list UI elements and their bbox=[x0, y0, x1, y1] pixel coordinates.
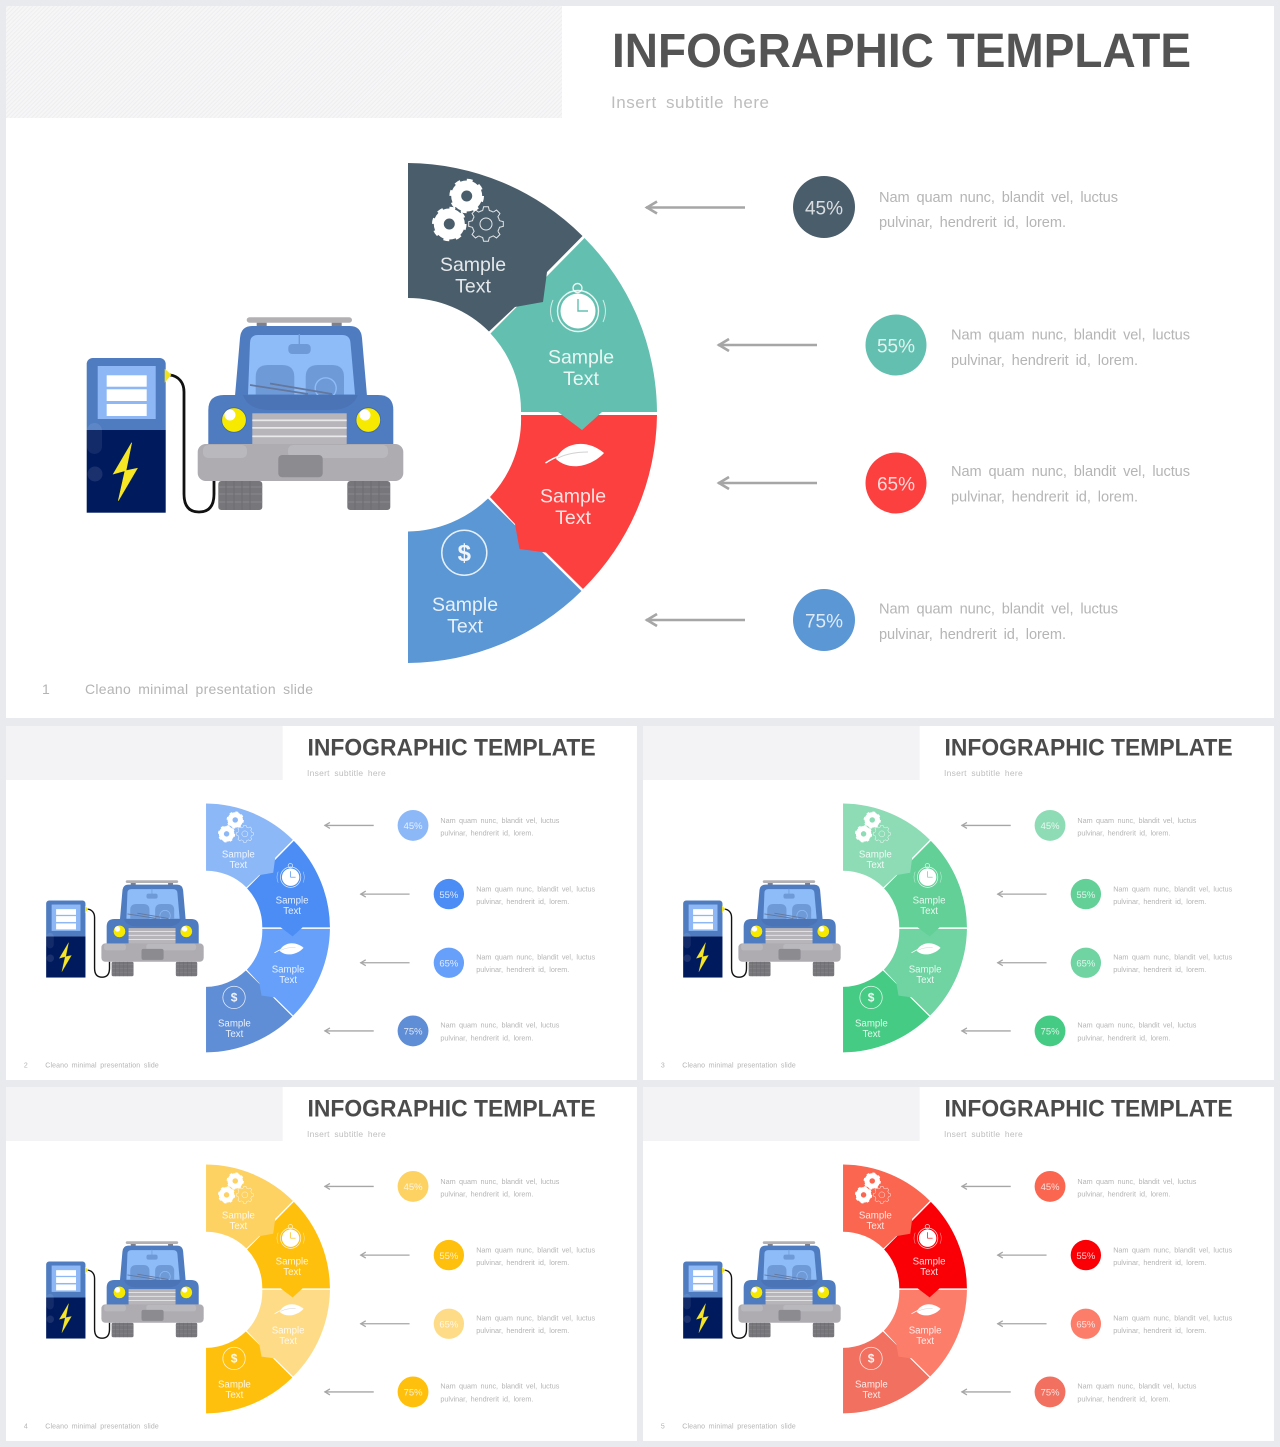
ring segment: dollar bbox=[843, 970, 929, 1052]
ring segment: gears: Sample bbox=[859, 1210, 892, 1221]
arrow 1 bbox=[961, 822, 1011, 828]
item 75% bbox=[1035, 1377, 1197, 1407]
item 75% bbox=[398, 1377, 560, 1407]
title: INFOGRAPHIC TEMPLATE bbox=[945, 735, 1233, 762]
subtitle: Insert subtitle here bbox=[944, 768, 1023, 778]
arrow 2 bbox=[360, 891, 410, 897]
item 45%: 45% bbox=[1041, 821, 1060, 832]
item 55%: 55% bbox=[439, 1251, 459, 1262]
item 55%: pulvinar, hendrerit id, lorem. bbox=[476, 1258, 569, 1267]
item 75% bbox=[398, 1016, 560, 1046]
arrow 4 bbox=[961, 1028, 1011, 1034]
item 55%: 55% bbox=[1076, 1251, 1096, 1262]
arrow 1 bbox=[324, 822, 374, 828]
item 75%: 75% bbox=[404, 1027, 423, 1038]
item 65%: 65% bbox=[1076, 1319, 1096, 1330]
item 55%: pulvinar, hendrerit id, lorem. bbox=[1113, 1258, 1206, 1267]
arrow 4 bbox=[646, 614, 745, 626]
ring segment: stopwatch: Text bbox=[283, 906, 301, 917]
item 55% bbox=[434, 879, 596, 909]
item 55%: Nam quam nunc, blandit vel, luctus bbox=[951, 328, 1190, 344]
ring segment: leaf bbox=[247, 929, 330, 1016]
item 75% bbox=[1035, 1016, 1197, 1046]
ring segment: dollar: Sample bbox=[218, 1379, 251, 1390]
item 45%: Nam quam nunc, blandit vel, luctus bbox=[879, 190, 1118, 206]
arrow 4 bbox=[324, 1389, 374, 1395]
ring segment: leaf: Sample bbox=[909, 1325, 942, 1336]
footer: 2 bbox=[24, 1063, 28, 1070]
item 75%: Nam quam nunc, blandit vel, luctus bbox=[879, 602, 1118, 618]
ring segment: leaf bbox=[247, 1290, 330, 1377]
item 65%: Nam quam nunc, blandit vel, luctus bbox=[951, 464, 1190, 480]
arrow 4 bbox=[324, 1028, 374, 1034]
item 75%: 75% bbox=[1041, 1027, 1060, 1038]
item 45%: pulvinar, hendrerit id, lorem. bbox=[879, 215, 1066, 231]
item 55%: pulvinar, hendrerit id, lorem. bbox=[476, 897, 569, 906]
item 55%: Nam quam nunc, blandit vel, luctus bbox=[1113, 1245, 1233, 1254]
item 75%: Nam quam nunc, blandit vel, luctus bbox=[440, 1021, 560, 1030]
ring segment: dollar bbox=[843, 1331, 929, 1413]
ring segment: leaf bbox=[884, 1290, 967, 1377]
item 45% bbox=[793, 176, 1118, 238]
subtitle: Insert subtitle here bbox=[307, 1129, 386, 1139]
item 65%: Nam quam nunc, blandit vel, luctus bbox=[1113, 1313, 1233, 1322]
ring segment: stopwatch bbox=[490, 238, 657, 430]
ring segment: stopwatch: Sample bbox=[276, 895, 309, 906]
item 75%: 75% bbox=[805, 612, 843, 632]
item 55%: 55% bbox=[877, 336, 915, 358]
ring segment: leaf: Text bbox=[916, 1336, 934, 1347]
title: INFOGRAPHIC TEMPLATE bbox=[945, 1096, 1233, 1123]
item 45%: pulvinar, hendrerit id, lorem. bbox=[1077, 1189, 1170, 1198]
ring segment: stopwatch: Sample bbox=[913, 895, 946, 906]
ring segment: leaf: Sample bbox=[272, 964, 305, 975]
ring segment: gears bbox=[206, 1165, 293, 1248]
slide 1: main slide bbox=[6, 6, 1274, 718]
ring segment: leaf bbox=[490, 415, 657, 589]
item 75%: 75% bbox=[1041, 1388, 1060, 1399]
item 55%: 55% bbox=[439, 890, 459, 901]
ring segment: stopwatch bbox=[884, 1202, 967, 1297]
ring segment: gears: Sample bbox=[440, 254, 506, 276]
slide 3: green variant bbox=[643, 726, 1274, 1080]
footer: 1 bbox=[42, 681, 50, 697]
ring segment: leaf: Text bbox=[279, 1336, 297, 1347]
slide 2: blue variant bbox=[6, 726, 637, 1080]
item 75%: Nam quam nunc, blandit vel, luctus bbox=[1077, 1021, 1197, 1030]
ring segment: stopwatch: Sample bbox=[276, 1256, 309, 1267]
ring segment: leaf: Text bbox=[916, 975, 934, 986]
electric car at charging pump bbox=[683, 1241, 841, 1339]
arrow 2 bbox=[997, 1252, 1047, 1258]
item 65%: 65% bbox=[439, 1319, 459, 1330]
header panel bbox=[6, 1087, 283, 1141]
ring segment: gears: Text bbox=[229, 860, 248, 871]
item 65%: pulvinar, hendrerit id, lorem. bbox=[476, 965, 569, 974]
ring segment: gears: Text bbox=[229, 1221, 248, 1232]
item 65%: 65% bbox=[1076, 958, 1096, 969]
arrow 1 bbox=[961, 1183, 1011, 1189]
ring segment: dollar: $ bbox=[231, 991, 238, 1005]
electric car at charging pump bbox=[46, 1241, 204, 1339]
item 75%: Nam quam nunc, blandit vel, luctus bbox=[1077, 1382, 1197, 1391]
ring segment: dollar: Text bbox=[226, 1029, 244, 1040]
electric car at charging pump bbox=[87, 317, 403, 513]
item 65%: 65% bbox=[439, 958, 459, 969]
title: INFOGRAPHIC TEMPLATE bbox=[612, 25, 1191, 78]
item 55%: Nam quam nunc, blandit vel, luctus bbox=[1113, 884, 1233, 893]
header panel bbox=[643, 1087, 920, 1141]
item 55%: pulvinar, hendrerit id, lorem. bbox=[1113, 897, 1206, 906]
ring segment: dollar bbox=[206, 970, 292, 1052]
slide 4: yellow variant bbox=[6, 1087, 637, 1441]
ring segment: leaf bbox=[884, 929, 967, 1016]
item 55%: 55% bbox=[1076, 890, 1096, 901]
ring segment: dollar: Text bbox=[226, 1390, 244, 1401]
footer: Cleano minimal presentation slide bbox=[85, 681, 313, 697]
footer: Cleano minimal presentation slide bbox=[45, 1424, 159, 1431]
item 75%: pulvinar, hendrerit id, lorem. bbox=[1077, 1033, 1170, 1042]
ring segment: dollar: Sample bbox=[432, 594, 498, 616]
ring segment: gears bbox=[206, 804, 293, 887]
ring segment: gears: Sample bbox=[222, 1210, 255, 1221]
electric car at charging pump bbox=[46, 880, 204, 978]
footer: Cleano minimal presentation slide bbox=[45, 1063, 159, 1070]
ring segment: gears: Sample bbox=[222, 849, 255, 860]
ring segment: dollar: Sample bbox=[855, 1018, 888, 1029]
header panel bbox=[6, 726, 283, 780]
item 45% bbox=[398, 810, 560, 841]
arrow 3 bbox=[360, 1321, 410, 1327]
item 65%: Nam quam nunc, blandit vel, luctus bbox=[476, 952, 596, 961]
footer: 4 bbox=[24, 1424, 28, 1431]
item 45% bbox=[1035, 810, 1197, 841]
item 55% bbox=[1071, 879, 1233, 909]
item 45%: Nam quam nunc, blandit vel, luctus bbox=[440, 816, 560, 825]
ring segment: dollar: $ bbox=[231, 1352, 238, 1366]
footer: Cleano minimal presentation slide bbox=[682, 1063, 796, 1070]
ring segment: dollar: $ bbox=[458, 540, 472, 567]
ring segment: gears: Text bbox=[455, 276, 491, 298]
item 45%: 45% bbox=[805, 198, 843, 220]
ring segment: stopwatch: Sample bbox=[548, 346, 614, 368]
ring segment: stopwatch bbox=[884, 841, 967, 936]
item 55%: Nam quam nunc, blandit vel, luctus bbox=[476, 884, 596, 893]
arrow 2 bbox=[360, 1252, 410, 1258]
ring segment: dollar bbox=[408, 498, 582, 663]
header panel bbox=[643, 726, 920, 780]
item 75%: pulvinar, hendrerit id, lorem. bbox=[440, 1033, 533, 1042]
ring segment: dollar: Text bbox=[447, 616, 483, 638]
item 55%: pulvinar, hendrerit id, lorem. bbox=[951, 353, 1138, 369]
arrow 3 bbox=[360, 960, 410, 966]
slide 5: red variant bbox=[643, 1087, 1274, 1441]
item 45%: 45% bbox=[1041, 1182, 1060, 1193]
ring segment: stopwatch: Text bbox=[563, 368, 599, 390]
item 45% bbox=[398, 1171, 560, 1202]
item 75%: pulvinar, hendrerit id, lorem. bbox=[1077, 1394, 1170, 1403]
arrow 4 bbox=[961, 1389, 1011, 1395]
subtitle: Insert subtitle here bbox=[944, 1129, 1023, 1139]
arrow 3 bbox=[718, 477, 817, 489]
ring segment: leaf: Text bbox=[555, 507, 591, 529]
ring segment: gears bbox=[843, 1165, 930, 1248]
item 45%: 45% bbox=[404, 1182, 423, 1193]
item 45%: Nam quam nunc, blandit vel, luctus bbox=[1077, 1177, 1197, 1186]
ring segment: stopwatch: Text bbox=[283, 1267, 301, 1278]
ring segment: stopwatch bbox=[247, 841, 330, 936]
ring segment: gears bbox=[408, 163, 582, 332]
item 45%: pulvinar, hendrerit id, lorem. bbox=[440, 828, 533, 837]
arrow 2 bbox=[718, 339, 817, 351]
item 65%: pulvinar, hendrerit id, lorem. bbox=[476, 1326, 569, 1335]
hatched header panel bbox=[6, 6, 562, 118]
ring segment: stopwatch: Sample bbox=[913, 1256, 946, 1267]
ring segment: gears: Sample bbox=[859, 849, 892, 860]
ring segment: dollar: Text bbox=[863, 1029, 881, 1040]
ring segment: leaf: Sample bbox=[909, 964, 942, 975]
electric car at charging pump bbox=[683, 880, 841, 978]
ring segment: leaf: Sample bbox=[272, 1325, 305, 1336]
subtitle: Insert subtitle here bbox=[307, 768, 386, 778]
item 65%: 65% bbox=[877, 474, 915, 496]
ring segment: gears bbox=[843, 804, 930, 887]
item 45%: pulvinar, hendrerit id, lorem. bbox=[1077, 828, 1170, 837]
ring segment: dollar: Sample bbox=[855, 1379, 888, 1390]
item 65%: Nam quam nunc, blandit vel, luctus bbox=[1113, 952, 1233, 961]
item 65%: pulvinar, hendrerit id, lorem. bbox=[951, 490, 1138, 506]
item 45% bbox=[1035, 1171, 1197, 1202]
ring segment: gears: Text bbox=[866, 860, 885, 871]
arrow 2 bbox=[997, 891, 1047, 897]
item 55% bbox=[1071, 1240, 1233, 1270]
item 65% bbox=[434, 948, 596, 978]
title: INFOGRAPHIC TEMPLATE bbox=[308, 1096, 596, 1123]
item 45%: 45% bbox=[404, 821, 423, 832]
ring segment: dollar: Text bbox=[863, 1390, 881, 1401]
footer: 5 bbox=[661, 1424, 665, 1431]
item 75% bbox=[793, 589, 1118, 651]
ring segment: stopwatch bbox=[247, 1202, 330, 1297]
arrow 3 bbox=[997, 960, 1047, 966]
ring segment: dollar: $ bbox=[868, 1352, 875, 1366]
item 65%: pulvinar, hendrerit id, lorem. bbox=[1113, 1326, 1206, 1335]
arrow 3 bbox=[997, 1321, 1047, 1327]
item 45%: Nam quam nunc, blandit vel, luctus bbox=[1077, 816, 1197, 825]
item 65%: Nam quam nunc, blandit vel, luctus bbox=[476, 1313, 596, 1322]
item 75%: Nam quam nunc, blandit vel, luctus bbox=[440, 1382, 560, 1391]
ring segment: leaf: Sample bbox=[540, 486, 606, 508]
item 45%: Nam quam nunc, blandit vel, luctus bbox=[440, 1177, 560, 1186]
item 65%: pulvinar, hendrerit id, lorem. bbox=[1113, 965, 1206, 974]
footer: 3 bbox=[661, 1063, 665, 1070]
footer: Cleano minimal presentation slide bbox=[682, 1424, 796, 1431]
item 75%: pulvinar, hendrerit id, lorem. bbox=[440, 1394, 533, 1403]
item 75%: pulvinar, hendrerit id, lorem. bbox=[879, 627, 1066, 643]
item 55%: Nam quam nunc, blandit vel, luctus bbox=[476, 1245, 596, 1254]
ring segment: leaf: Text bbox=[279, 975, 297, 986]
item 55% bbox=[434, 1240, 596, 1270]
item 65% bbox=[434, 1309, 596, 1339]
ring segment: stopwatch: Text bbox=[920, 1267, 938, 1278]
arrow 1 bbox=[646, 202, 745, 214]
item 75%: 75% bbox=[404, 1388, 423, 1399]
title: INFOGRAPHIC TEMPLATE bbox=[308, 735, 596, 762]
ring segment: stopwatch: Text bbox=[920, 906, 938, 917]
ring segment: gears: Text bbox=[866, 1221, 885, 1232]
subtitle: Insert subtitle here bbox=[611, 93, 769, 112]
ring segment: dollar: Sample bbox=[218, 1018, 251, 1029]
arrow 1 bbox=[324, 1183, 374, 1189]
ring segment: dollar: $ bbox=[868, 991, 875, 1005]
item 45%: pulvinar, hendrerit id, lorem. bbox=[440, 1189, 533, 1198]
item 65% bbox=[866, 452, 1190, 514]
item 65% bbox=[1071, 1309, 1233, 1339]
ring segment: dollar bbox=[206, 1331, 292, 1413]
item 55% bbox=[866, 314, 1190, 376]
item 65% bbox=[1071, 948, 1233, 978]
